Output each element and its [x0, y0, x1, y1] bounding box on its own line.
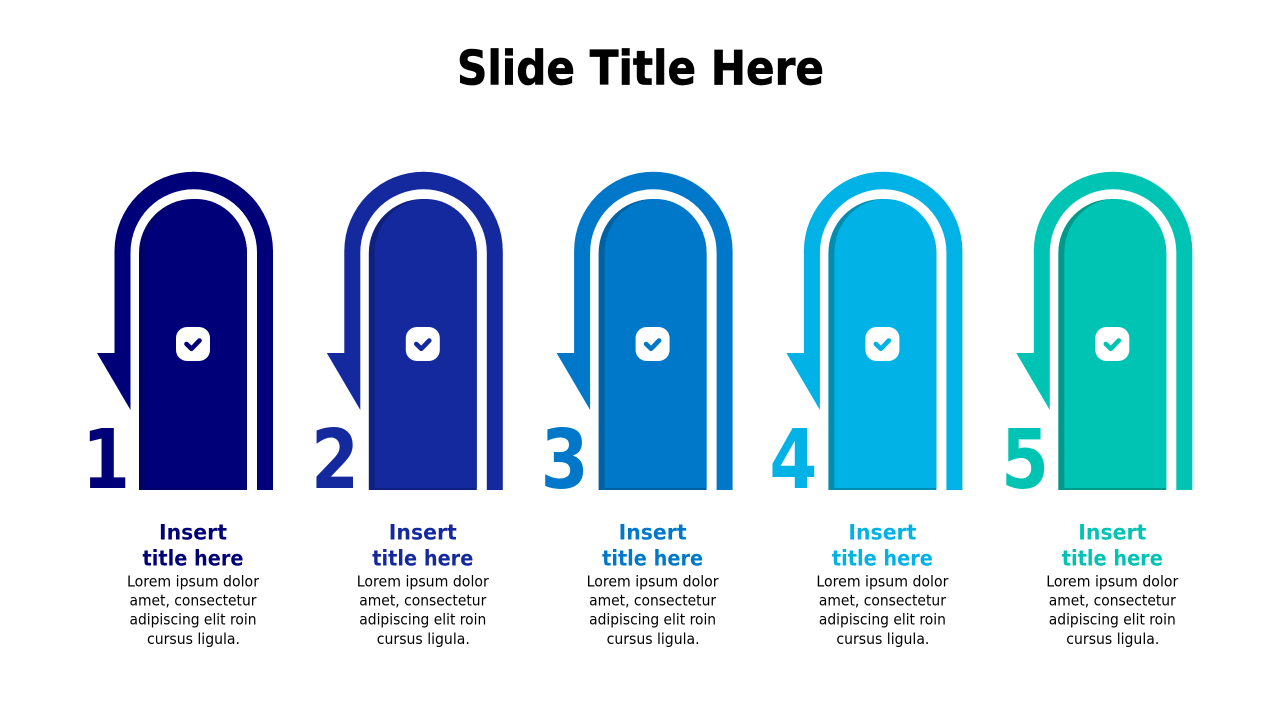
- step text: amet, consectetur: [130, 592, 257, 610]
- step heading: [832, 520, 933, 570]
- arrow band: [97, 172, 273, 490]
- step text: adipiscing elit roin: [359, 610, 486, 628]
- step heading: [142, 520, 244, 570]
- panel: step 5: [1001, 172, 1192, 648]
- step text: [1046, 572, 1179, 648]
- icon: check badge: [406, 327, 440, 361]
- step heading: Insert: [619, 520, 687, 544]
- arrow band: [786, 172, 962, 490]
- arrow band: [327, 172, 503, 490]
- step text: cursus ligula.: [1066, 630, 1159, 648]
- step heading: Insert: [1078, 520, 1146, 544]
- step heading: [602, 520, 703, 570]
- step heading: title here: [832, 546, 933, 570]
- panel: step 4: [769, 172, 962, 648]
- step text: Lorem ipsum dolor: [816, 572, 949, 590]
- arrow band: [557, 172, 733, 490]
- step text: adipiscing elit roin: [130, 610, 256, 628]
- step text: Lorem ipsum dolor: [587, 572, 719, 590]
- step text: amet, consectetur: [359, 592, 487, 610]
- step heading: title here: [1062, 546, 1163, 570]
- step text: adipiscing elit roin: [1049, 610, 1176, 628]
- step heading: [1062, 520, 1163, 570]
- icon: check badge: [865, 327, 899, 361]
- step text: adipiscing elit roin: [589, 610, 716, 628]
- step text: Lorem ipsum dolor: [127, 572, 260, 590]
- step text: cursus ligula.: [147, 630, 240, 648]
- icon: check badge: [1095, 327, 1129, 361]
- step text: amet, consectetur: [819, 592, 946, 610]
- step text: cursus ligula.: [836, 630, 929, 648]
- step text: [816, 572, 949, 648]
- step text: Lorem ipsum dolor: [357, 572, 489, 590]
- step text: Lorem ipsum dolor: [1046, 572, 1179, 590]
- title: Slide Title Here: [457, 42, 824, 96]
- number 5: 5: [1001, 413, 1049, 508]
- icon: check badge: [176, 327, 210, 361]
- step heading: title here: [372, 546, 473, 570]
- number 4: 4: [769, 413, 817, 508]
- panel: step 3: [541, 172, 733, 648]
- door: [369, 199, 477, 490]
- step text: [357, 572, 489, 648]
- number 2: 2: [311, 413, 359, 508]
- door: [139, 199, 247, 490]
- step heading: title here: [602, 546, 703, 570]
- step heading: [372, 520, 473, 570]
- arrow band: [1016, 172, 1192, 490]
- door: [1058, 199, 1166, 490]
- step text: cursus ligula.: [607, 630, 700, 648]
- step text: amet, consectetur: [1049, 592, 1176, 610]
- door: [599, 199, 707, 490]
- step text: adipiscing elit roin: [819, 610, 946, 628]
- step heading: Insert: [848, 520, 916, 544]
- step heading: Insert: [389, 520, 457, 544]
- step heading: title here: [142, 546, 244, 570]
- step text: [587, 572, 719, 648]
- step text: amet, consectetur: [589, 592, 717, 610]
- panel: step 1: [82, 172, 273, 648]
- number 1: 1: [82, 413, 130, 508]
- icon: check badge: [636, 327, 670, 361]
- step text: cursus ligula.: [377, 630, 470, 648]
- number 3: 3: [541, 413, 589, 508]
- panel: step 2: [311, 172, 503, 648]
- step text: [127, 572, 260, 648]
- door: [828, 199, 936, 490]
- step heading: Insert: [159, 520, 227, 544]
